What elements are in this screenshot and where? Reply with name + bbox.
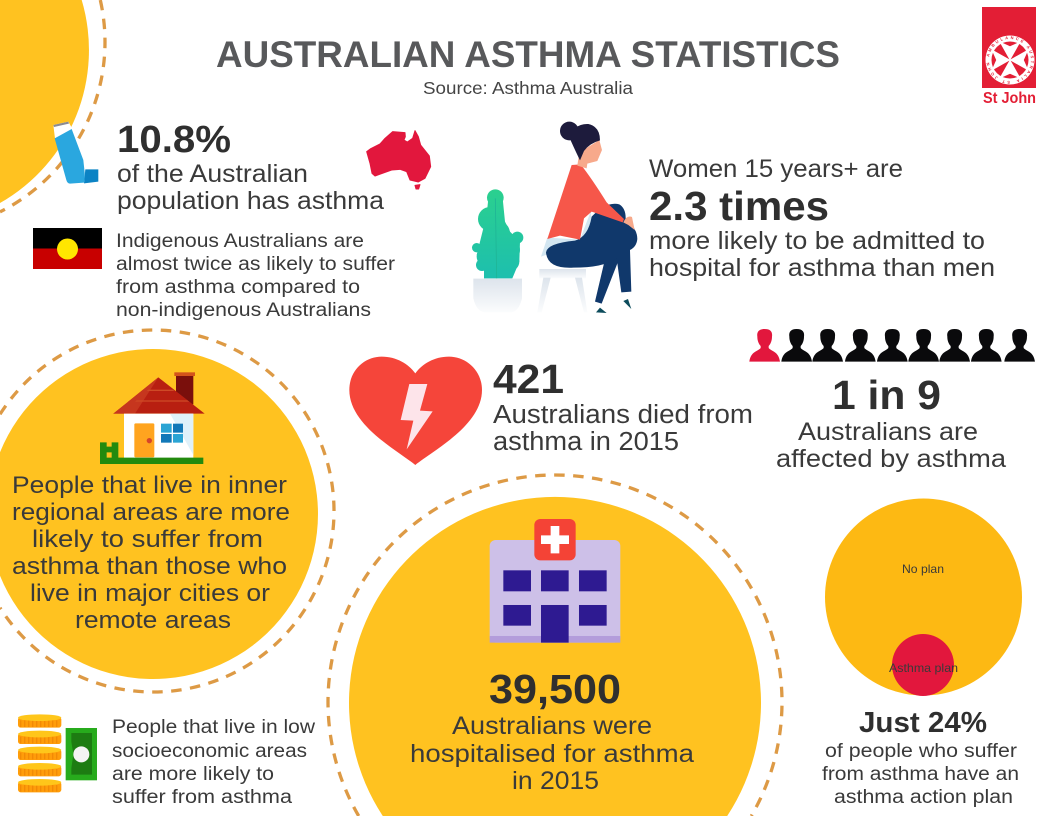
text: inner regional: regional areas are more (12, 499, 290, 526)
icon: map of Australia (367, 131, 431, 189)
text: Indigenous Australians: from asthma compared to (116, 277, 360, 298)
logo: St John (982, 7, 1036, 107)
stat: 421 deaths: asthma in 2015 (493, 428, 679, 456)
chart: asthma action plan circles: Asthma plan (889, 661, 958, 675)
text: inner regional: remote areas (75, 607, 231, 634)
stat: just 24%: Just 24% (859, 707, 987, 739)
chart: asthma action plan circles (825, 498, 1022, 696)
stat: 39,500 hospitalised: Australians were (452, 712, 652, 740)
stat: women 2.3 times: more likely to be admitted to (649, 227, 985, 255)
text: inner regional: likely to suffer from (32, 526, 263, 553)
text: inner regional (12, 472, 290, 634)
text: low socioeconomic areas: are more likely to (112, 764, 274, 785)
text: inner regional: asthma than those who (12, 553, 287, 580)
text: Indigenous Australians: Indigenous Australians are (116, 231, 364, 252)
stat: 10.8% of population: 10.8% (117, 119, 231, 161)
icon: hospital (490, 519, 620, 643)
stat: just 24%: asthma action plan (834, 787, 1013, 808)
logo: St John: St John (983, 90, 1036, 107)
stat: 1 in 9: Australians are (798, 418, 978, 446)
stat: women 2.3 times (649, 155, 995, 282)
stat: women 2.3 times: 2.3 times (649, 183, 829, 229)
stat: 10.8% of population: population has asthma (117, 187, 384, 215)
stat: 421 deaths: Australians died from (493, 401, 753, 429)
stat: just 24%: of people who suffer (825, 741, 1018, 762)
illustration: seated woman (537, 122, 637, 313)
stat: 39,500 hospitalised: 39,500 (489, 666, 621, 712)
stat: 1 in 9: 1 in 9 (832, 372, 941, 418)
panel: inner regional areas (0, 330, 334, 692)
title (216, 34, 840, 98)
stat: 10.8% of population: of the Australian (117, 160, 308, 188)
stat: 39,500 hospitalised: in 2015 (512, 767, 599, 795)
logo: St John: ST JOHN AMBULANCE AUSTRALIA (986, 36, 1034, 84)
panel: hospitalisations (328, 475, 782, 816)
text: inner regional: People that live in inner (12, 472, 287, 499)
icon: coins and banknote (18, 714, 97, 792)
title: Source: Asthma Australia (423, 78, 633, 98)
decorative corner circle (0, 0, 105, 212)
stat: 1 in 9 (776, 372, 1006, 473)
pictogram: 1 in 9 people (749, 329, 1035, 362)
stat: just 24% (822, 707, 1019, 808)
text: Indigenous Australians: almost twice as likely to suffer (116, 254, 396, 275)
text: Indigenous Australians: non-indigenous Australians (116, 300, 371, 321)
chart: asthma action plan circles: No plan (902, 562, 944, 576)
text: low socioeconomic areas: People that live in low (112, 717, 315, 738)
stat: women 2.3 times: Women 15 years+ are (649, 155, 903, 183)
stat: 421 deaths: 421 (493, 356, 564, 402)
stat: women 2.3 times: hospital for asthma than men (649, 254, 995, 282)
text: inner regional: live in major cities or (30, 580, 270, 607)
stat: 1 in 9: affected by asthma (776, 445, 1006, 473)
stat: 39,500 hospitalised: hospitalised for asthma (410, 740, 694, 768)
icon: house (100, 372, 205, 464)
illustration: plant in pot (472, 189, 523, 312)
text: low socioeconomic areas: socioeconomic areas (112, 741, 307, 762)
text: low socioeconomic areas: suffer from asthma (112, 787, 292, 808)
icon: Aboriginal flag (33, 228, 102, 269)
title: AUSTRALIAN ASTHMA STATISTICS (216, 34, 840, 75)
icon: heart with lightning (349, 357, 482, 465)
stat: just 24%: from asthma have an (822, 764, 1019, 785)
stat: 10.8% of population (117, 119, 384, 215)
stool (537, 269, 587, 312)
stat: 421 deaths (493, 356, 753, 456)
text: low socioeconomic areas (112, 717, 315, 808)
stat: 39,500 hospitalised (410, 666, 694, 795)
icon: inhaler (53, 122, 98, 184)
text: Indigenous Australians (116, 231, 396, 321)
